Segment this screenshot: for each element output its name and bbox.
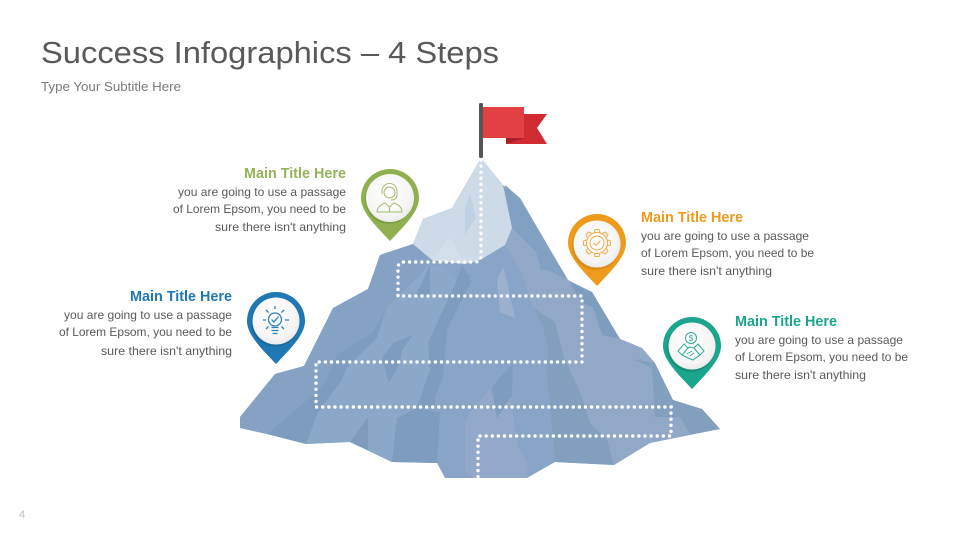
flag: [479, 103, 547, 158]
flag fold: [506, 138, 524, 144]
flag back ribbon: [506, 114, 547, 144]
text block: blue: sure there isn't anything: [101, 344, 232, 358]
snow cap: [413, 158, 512, 264]
icon: headset agent: [377, 184, 402, 212]
text block: green: Main Title Here: [244, 165, 346, 182]
pin: blue bulb: [247, 292, 305, 364]
text block: blue: [59, 288, 232, 358]
text block: blue: of Lorem Epsom, you need to be: [59, 325, 232, 339]
pin: green support: [361, 169, 419, 241]
text block: teal: sure there isn't anything: [735, 368, 866, 382]
subtitle: Type Your Subtitle Here: [41, 80, 181, 94]
text block: blue: you are going to use a passage: [64, 308, 232, 322]
text block: green: [173, 165, 346, 234]
icon: handshake with coin: $: [689, 334, 694, 343]
text block: green: sure there isn't anything: [215, 220, 346, 234]
text block: green: you are going to use a passage: [178, 185, 346, 199]
icon: light bulb with check: [263, 306, 289, 334]
icon: gear with check: [584, 230, 610, 256]
text block: teal: [735, 313, 908, 382]
text block: orange: of Lorem Epsom, you need to be: [641, 246, 814, 260]
text block: orange: sure there isn't anything: [641, 264, 772, 278]
flag pole: [479, 103, 483, 158]
text block: orange: Main Title Here: [641, 209, 743, 226]
title: Success Infographics – 4 Steps: [41, 35, 499, 70]
flag front: [483, 107, 524, 138]
mountain illustration: [240, 158, 720, 478]
text block: teal: Main Title Here: [735, 313, 837, 330]
dotted route: [316, 160, 671, 478]
page number: 4: [19, 509, 25, 521]
text block: green: of Lorem Epsom, you need to be: [173, 202, 346, 216]
text block: orange: you are going to use a passage: [641, 229, 809, 243]
text block: teal: you are going to use a passage: [735, 333, 903, 347]
text block: orange: [641, 209, 814, 278]
pin: teal handshake: [663, 317, 721, 389]
text block: teal: of Lorem Epsom, you need to be: [735, 350, 908, 364]
text block: blue: Main Title Here: [130, 288, 232, 305]
pin: orange gear: [568, 214, 626, 286]
